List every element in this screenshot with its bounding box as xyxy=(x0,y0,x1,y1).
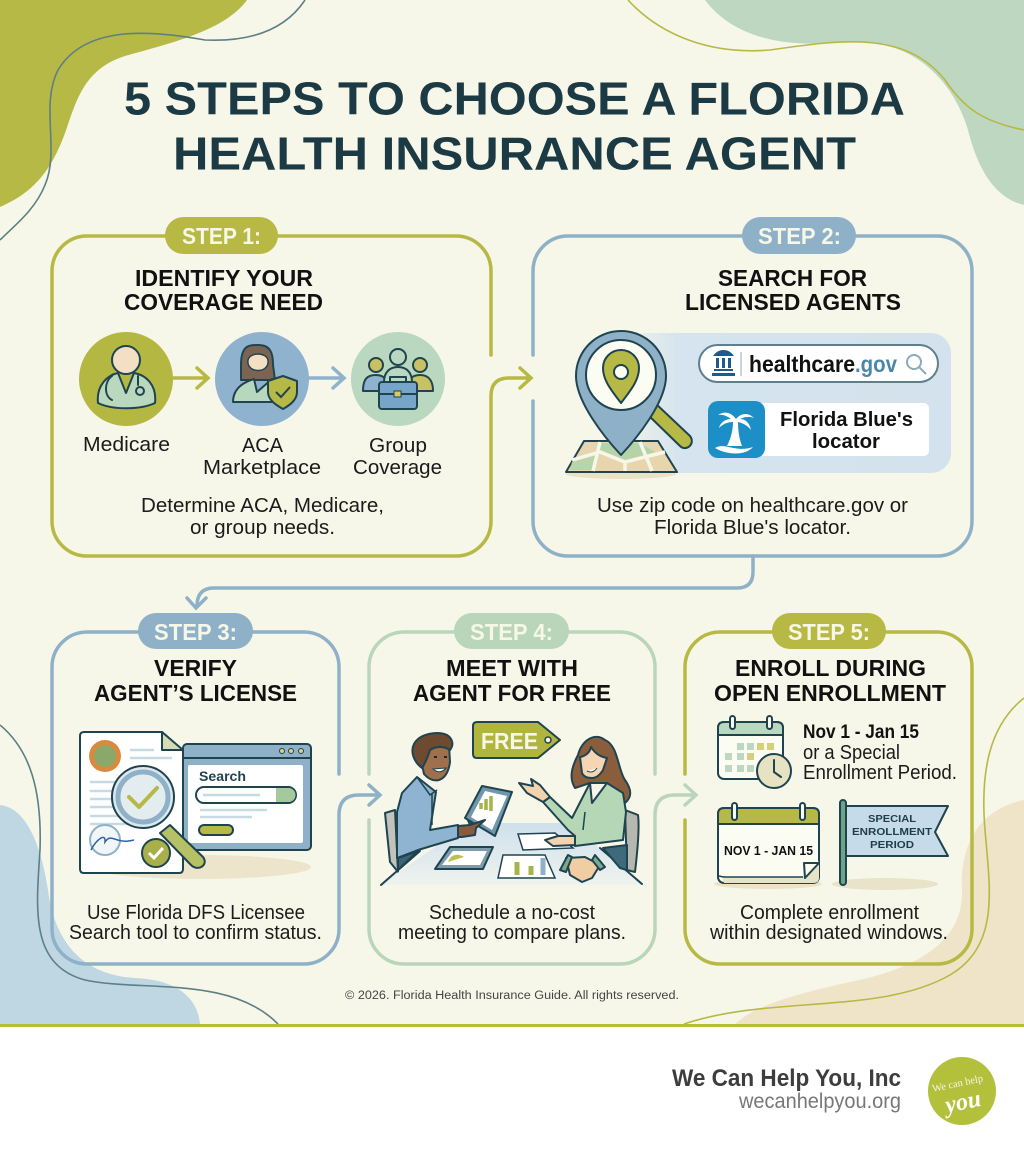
panel: step 1: STEP 1: xyxy=(182,223,261,249)
description xyxy=(141,495,384,539)
description: meeting to compare plans. xyxy=(398,922,626,944)
icon: medicare doctor xyxy=(79,332,173,426)
labels: Coverage xyxy=(353,457,442,479)
description xyxy=(398,902,626,944)
description xyxy=(709,902,948,944)
description xyxy=(597,495,908,539)
labels: Group xyxy=(369,435,427,457)
icon: group coverage xyxy=(351,332,445,426)
icon: large calendar: NOV 1 - JAN 15 xyxy=(724,843,813,858)
icon: license document, browser and magnifier: Search xyxy=(199,768,246,784)
text: dates: Nov 1 - Jan 15 xyxy=(803,722,919,743)
footer rule xyxy=(0,1024,1024,1027)
panel: step 5 xyxy=(685,613,972,964)
arrow: step 2 to step 3 xyxy=(187,556,753,608)
card: Florida Blue's locator xyxy=(708,401,929,458)
footer brand: wecanhelpyou.org xyxy=(738,1090,901,1113)
description: Determine ACA, Medicare, xyxy=(141,495,384,517)
title: 5 STEPS TO CHOOSE A FLORIDA xyxy=(124,72,905,124)
icon: ACA marketplace xyxy=(215,332,309,426)
search bar: healthcare.gov: .gov xyxy=(855,351,897,377)
arrow xyxy=(309,368,344,388)
card: Florida Blue's locator: locator xyxy=(812,431,880,453)
panel: step 2: SEARCH FOR xyxy=(718,265,867,291)
icon: FREE tag: FREE xyxy=(481,728,538,754)
search bar: healthcare.gov: healthcare xyxy=(749,351,855,377)
description: Schedule a no-cost xyxy=(429,902,595,924)
panel: step 4: AGENT FOR FREE xyxy=(413,680,611,706)
panel: step 5: OPEN ENROLLMENT xyxy=(714,680,946,706)
icon: license document, browser and magnifier xyxy=(80,732,311,879)
description xyxy=(69,902,322,944)
footer brand xyxy=(672,1065,901,1113)
copyright: © 2026. Florida Health Insurance Guide. All rights reserved. xyxy=(345,990,679,1002)
labels: Marketplace xyxy=(203,457,321,479)
text: dates: or a Special xyxy=(803,742,900,764)
icon: special enrollment flag: ENROLLMENT xyxy=(852,826,933,838)
logo xyxy=(928,1057,996,1125)
icon: special enrollment flag xyxy=(832,800,948,890)
panel: step 1 xyxy=(52,217,531,556)
description: or group needs. xyxy=(190,517,335,539)
panel: step 3: STEP 3: xyxy=(154,619,237,645)
icon: special enrollment flag: PERIOD xyxy=(870,839,914,851)
text: dates: Enrollment Period. xyxy=(803,762,957,784)
icon: special enrollment flag: SPECIAL xyxy=(868,813,917,825)
panel: step 2 xyxy=(533,217,972,556)
card: Florida Blue's locator: Florida Blue's xyxy=(780,409,913,431)
search bar: healthcare.gov xyxy=(699,345,938,382)
description: Florida Blue's locator. xyxy=(654,517,851,539)
panel: step 1: COVERAGE NEED xyxy=(124,289,323,315)
panel: step 5: STEP 5: xyxy=(788,619,870,645)
panel: step 2: LICENSED AGENTS xyxy=(685,289,901,315)
icon: FREE tag xyxy=(473,722,560,758)
description: Search tool to confirm status. xyxy=(69,922,322,944)
illustration: agent meeting xyxy=(380,733,643,885)
description: Use zip code on healthcare.gov or xyxy=(597,495,908,517)
arrow xyxy=(173,368,208,388)
panel: step 3 xyxy=(52,613,380,964)
panel: step 3: VERIFY xyxy=(154,655,237,681)
icon: map and location pin xyxy=(566,331,692,479)
labels xyxy=(83,434,442,479)
icon: calendar with clock xyxy=(718,716,791,788)
title: HEALTH INSURANCE AGENT xyxy=(173,128,856,180)
labels: Medicare xyxy=(83,434,170,456)
title xyxy=(124,72,905,180)
panel: step 4 xyxy=(369,613,696,964)
description: Use Florida DFS Licensee xyxy=(87,902,305,924)
footer brand: We Can Help You, Inc xyxy=(672,1065,901,1092)
panel: step 3: AGENT’S LICENSE xyxy=(94,680,297,706)
panel: step 5: ENROLL DURING xyxy=(735,655,926,681)
panel: step 4: MEET WITH xyxy=(446,655,578,681)
panel: step 4: STEP 4: xyxy=(470,619,553,645)
panel: step 2: STEP 2: xyxy=(758,223,841,249)
description: Complete enrollment xyxy=(740,902,919,924)
description: within designated windows. xyxy=(709,922,948,944)
logo: We can help xyxy=(931,1073,984,1095)
text: dates xyxy=(803,722,957,784)
labels: ACA xyxy=(242,435,284,457)
panel: step 1: IDENTIFY YOUR xyxy=(135,265,313,291)
icon: large calendar xyxy=(714,803,822,889)
logo: you xyxy=(940,1086,983,1119)
